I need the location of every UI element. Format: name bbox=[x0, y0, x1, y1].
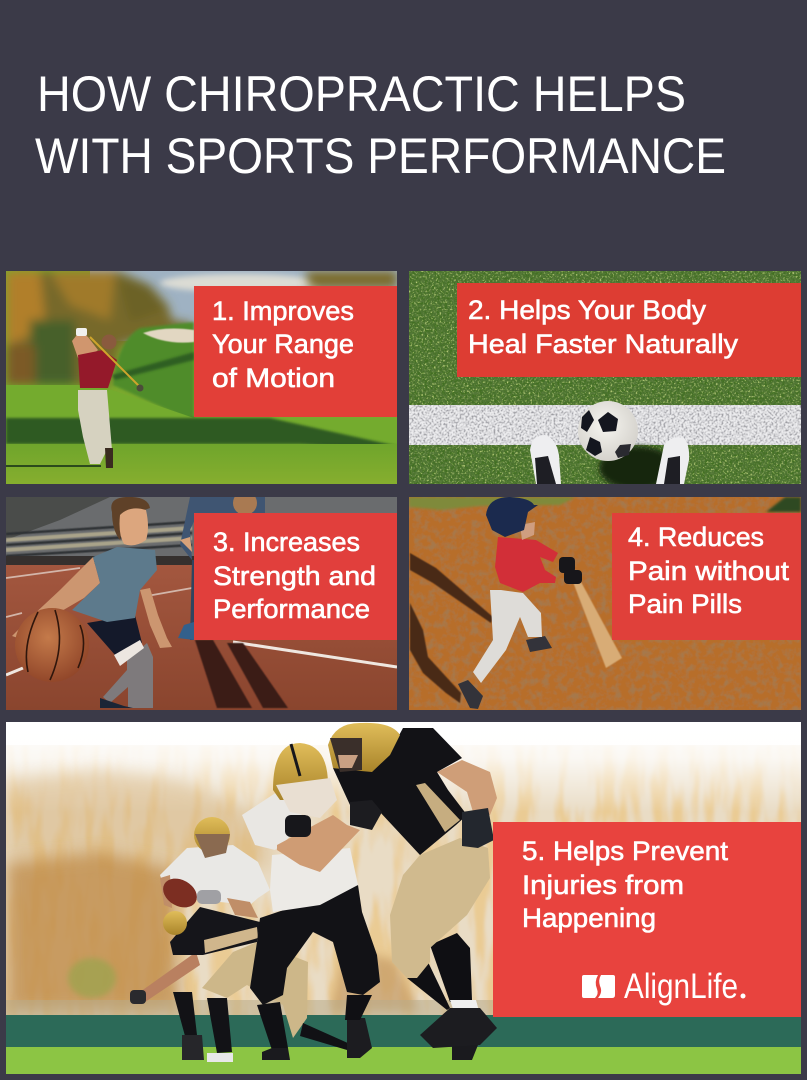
logo: AlignLife bbox=[582, 967, 746, 1006]
figure: boy batter bbox=[458, 497, 582, 709]
label box: 3: 3. Increases bbox=[213, 527, 360, 557]
panel: 3 increases strength bbox=[6, 491, 397, 710]
photo: golfer on fairway bbox=[6, 271, 397, 484]
figure: adult behind bbox=[178, 491, 265, 640]
label box: 5: 5. Helps Prevent bbox=[522, 836, 729, 866]
panel: 1 improves range of motion bbox=[6, 271, 397, 484]
label box: 5: Injuries from bbox=[522, 870, 684, 900]
label box: 1: of Motion bbox=[212, 363, 335, 393]
figure: golfer bbox=[72, 328, 144, 468]
label box: 5: Happening bbox=[522, 903, 656, 933]
label box: 3: Strength and bbox=[213, 561, 376, 591]
icon: left shoe bbox=[530, 435, 561, 484]
label box: 2 bbox=[457, 283, 801, 377]
title: HOW CHIROPRACTIC HELPS bbox=[37, 66, 686, 122]
label box: 4 bbox=[612, 513, 801, 640]
icon: baseball bat bbox=[573, 580, 622, 668]
panel: 4 reduces pain bbox=[409, 497, 801, 710]
label box: 3: Performance bbox=[213, 594, 370, 624]
figure: boy with basketball bbox=[12, 497, 172, 708]
label box: 1 bbox=[194, 286, 397, 417]
logo: AlignLife: AlignLife bbox=[624, 967, 738, 1006]
panel: 2 helps body heal faster bbox=[409, 271, 801, 490]
label box: 4: Pain without bbox=[628, 556, 790, 586]
panel: 5 prevents injuries bbox=[6, 722, 801, 1074]
label box: 4: 4. Reduces bbox=[628, 522, 764, 552]
photo: football tackle bbox=[6, 722, 801, 1074]
label box: 1: Your Range bbox=[212, 329, 354, 359]
label box: 2: 2. Helps Your Body bbox=[468, 295, 707, 325]
photo: soccer ball on turf bbox=[409, 271, 801, 490]
photo: boy dribbling on track bbox=[6, 491, 397, 710]
label box: 2: Heal Faster Naturally bbox=[468, 329, 739, 359]
label box: 3 bbox=[194, 513, 397, 640]
icon: right shoe bbox=[656, 437, 689, 484]
label box: 4: Pain Pills bbox=[628, 589, 742, 619]
figure: white jersey tackler bbox=[242, 743, 380, 1060]
photo: young batter on dirt bbox=[409, 497, 801, 710]
label box: 5 bbox=[493, 822, 801, 1017]
icon: soccer ball bbox=[578, 401, 638, 461]
title bbox=[35, 66, 726, 184]
figure: rear player with football bbox=[130, 817, 372, 1062]
figure: black jersey player bbox=[328, 723, 497, 1060]
icon: basketball bbox=[15, 608, 89, 682]
label box: 1: 1. Improves bbox=[212, 296, 354, 326]
background: autumn trees bbox=[6, 747, 801, 1015]
title: WITH SPORTS PERFORMANCE bbox=[35, 128, 726, 184]
